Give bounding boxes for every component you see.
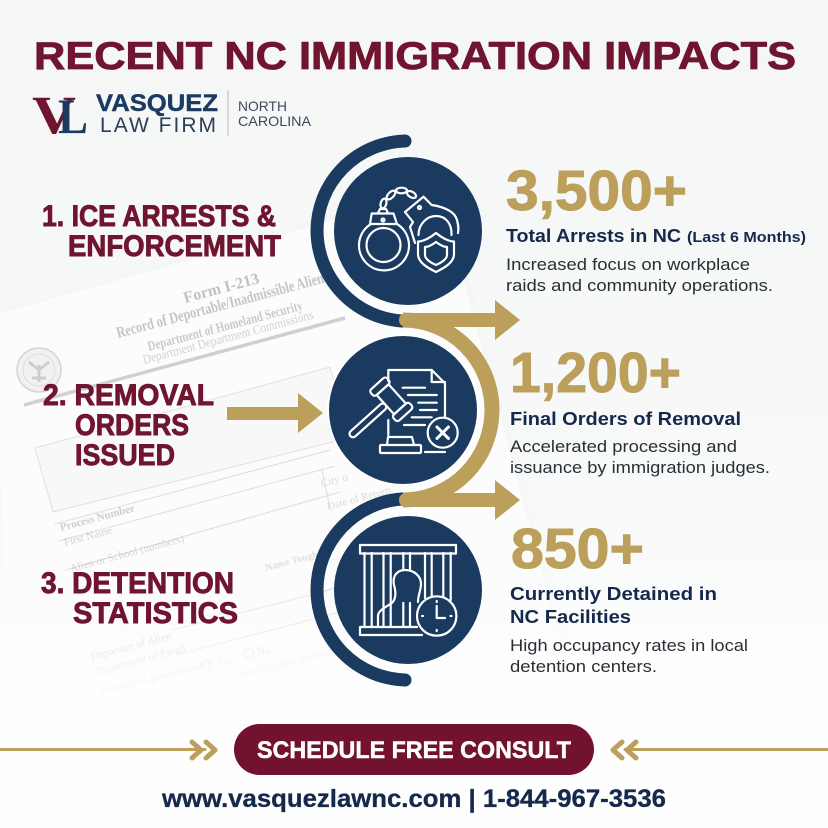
logo: Vasquez Law Firm North Carolina: VASQUEZ: [96, 90, 218, 117]
stat block: detention: NC Facilities: [510, 607, 631, 627]
stat block: arrests: (Last 6 Months): [687, 229, 806, 246]
logo: Vasquez Law Firm North Carolina: LAW FIRM: [100, 114, 216, 137]
heading: 2. Removal Orders Issued: 2. REMOVAL: [43, 379, 214, 412]
background document: Form I-213: Name Tough: [264, 549, 320, 574]
background document: Form I-213: Department of Email: [95, 642, 187, 678]
stat block: arrests: Total Arrests in NC: [506, 226, 681, 246]
stat block: detention: High occupancy rates in local: [510, 636, 748, 655]
icon: gavel and document: [327, 334, 479, 486]
heading: 2. Removal Orders Issued: ORDERS: [75, 409, 189, 442]
stat block: removal orders: [510, 341, 770, 477]
arc: navy bottom: [317, 499, 405, 680]
stat block: detention: 850+: [511, 517, 644, 581]
background document: Form I-213: First Name: [63, 525, 113, 549]
stat block: detention: [510, 517, 748, 676]
icon: handcuffs and shield: [334, 157, 482, 305]
logo: Vasquez Law Firm North Carolina: [32, 85, 312, 145]
stat block: arrests: Increased focus on workplace: [506, 255, 750, 274]
logo: Vasquez Law Firm North Carolina: NORTH: [238, 98, 287, 114]
background document: Form I-213: Inherent in present court?: [100, 657, 212, 698]
heading: 1. ICE Arrests & Enforcement: 1. ICE ARRESTS &: [42, 200, 276, 233]
background document: Form I-213: City o: [320, 471, 350, 490]
background document: Form I-213: Form I-213: [182, 270, 261, 307]
icon: jail bars and clock: [334, 516, 482, 664]
logo: Vasquez Law Firm North Carolina: L: [58, 88, 88, 144]
logo: Vasquez Law Firm North Carolina: V: [32, 85, 76, 145]
stat block: detention: detention centers.: [510, 657, 657, 676]
arrow: removal orders to circle: [227, 393, 323, 433]
background document: Form I-213: No: [257, 645, 271, 657]
background document: Form I-213: Department of Homeland Security: [146, 299, 305, 355]
logo: Vasquez Law Firm North Carolina: CAROLINA: [238, 113, 312, 129]
contact line: www.vasquezlawnc.com | 1-844-967-3536: [161, 785, 666, 813]
stat block: arrests: [506, 159, 806, 295]
stat block: removal orders: issuance by immigration judges.: [510, 458, 770, 477]
heading: 3. Detention Statistics: 3. DETENTION: [41, 567, 234, 600]
heading: 2. Removal Orders Issued: ISSUED: [75, 439, 175, 472]
background document: Form I-213: Yes: [216, 655, 232, 667]
arrow: left double chevron line: [0, 742, 215, 758]
background document: Form I-213: Department Department Commissions: [141, 307, 315, 367]
background document: Form I-213: Record of Deportable/Inadmissible Alien: [115, 270, 326, 342]
heading: 1. ICE Arrests & Enforcement: [42, 200, 281, 263]
stat block: arrests: 3,500+: [506, 159, 687, 223]
background document: Form I-213: Alien or School (numbers): [69, 533, 186, 575]
button: schedule free consult: [234, 724, 594, 775]
stat block: removal orders: 1,200+: [510, 341, 681, 405]
stat block: arrests: raids and community operations.: [506, 276, 773, 295]
background document: Form I-213: Process Number: [59, 502, 136, 534]
stat block: removal orders: Accelerated processing and: [510, 437, 737, 456]
connector: gold S-curve with arrows: [399, 300, 520, 520]
button: schedule free consult: SCHEDULE FREE CONSULT: [257, 737, 571, 764]
stat block: removal orders: Final Orders of Removal: [510, 409, 741, 429]
background document: Form I-213: [0, 190, 828, 828]
arc: navy top: [317, 141, 405, 321]
heading: 2. Removal Orders Issued: [43, 379, 214, 472]
heading: 1. ICE Arrests & Enforcement: ENFORCEMENT: [68, 230, 281, 263]
heading: 3. Detention Statistics: STATISTICS: [73, 597, 238, 630]
arrow: right double chevron line: [613, 742, 828, 758]
background document: Form I-213: Date of Return: [326, 484, 392, 513]
stat block: detention: Currently Detained in: [510, 584, 717, 604]
title: RECENT NC IMMIGRATION IMPACTS: [34, 35, 796, 78]
background document: Form I-213: Departure of Alien: [90, 630, 173, 663]
heading: 3. Detention Statistics: [41, 567, 238, 630]
background document: Form I-213: The role managed and the others shipline marriages: [120, 642, 343, 713]
